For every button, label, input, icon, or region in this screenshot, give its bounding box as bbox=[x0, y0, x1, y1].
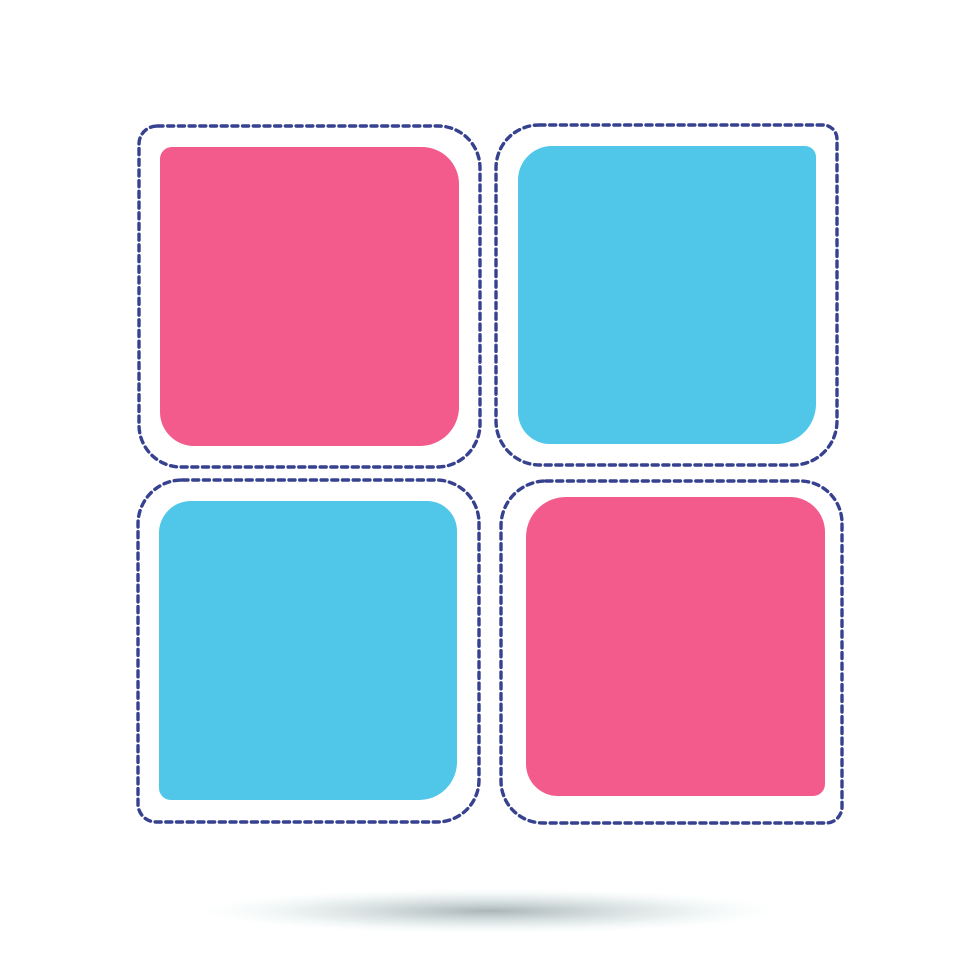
outline: top-right dashed border bbox=[496, 125, 837, 465]
panel: bottom-right pink tile bbox=[501, 481, 842, 823]
tile: bottom-left blue square bbox=[159, 501, 457, 800]
tile: bottom-right pink square bbox=[526, 497, 825, 796]
outline: bottom-left dashed border bbox=[138, 480, 479, 822]
panel: top-right blue tile bbox=[496, 125, 837, 465]
panel: bottom-left blue tile bbox=[138, 480, 479, 822]
outline: bottom-right dashed border bbox=[501, 481, 842, 823]
tile: top-right blue square bbox=[518, 146, 816, 444]
ground shadow bbox=[195, 888, 785, 934]
outline: top-left dashed border bbox=[139, 126, 480, 467]
tile: top-left pink square bbox=[160, 147, 459, 446]
panel: top-left pink tile bbox=[139, 126, 480, 467]
